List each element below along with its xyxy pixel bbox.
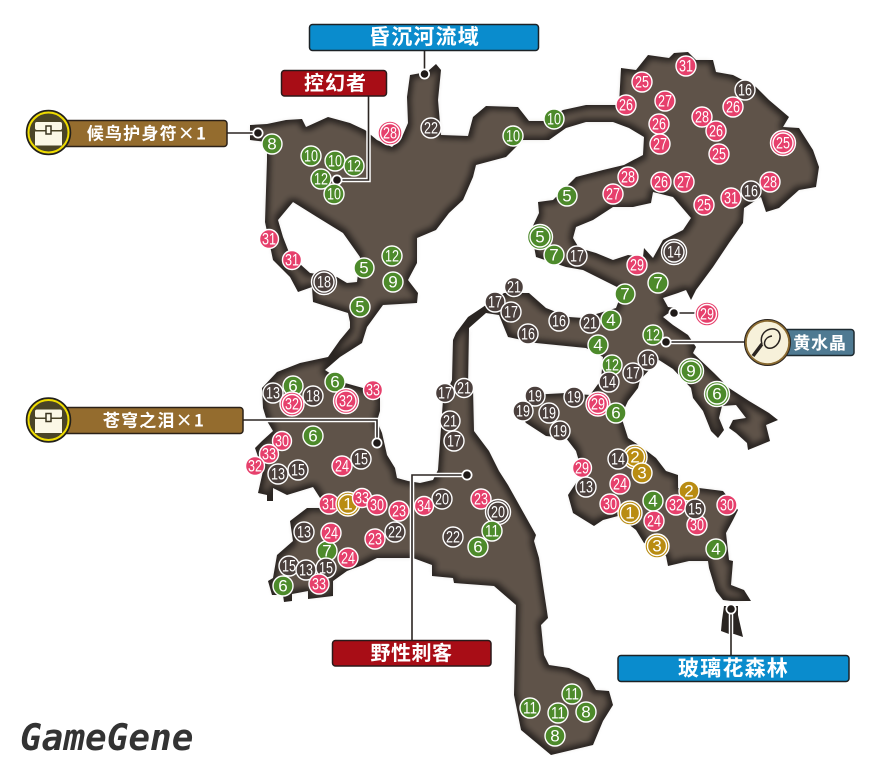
markers: south-west area: 24 [341,548,355,568]
markers: south-east area: 29 [575,458,589,478]
markers: south-west area: 18 [306,386,320,406]
markers: south-east area: 14 [611,450,625,468]
markers: central corridor and south tail: 11 [551,704,565,722]
markers: north-west area: 31 [262,230,276,248]
label: 玻璃花森林: 玻璃花森林 [678,652,789,682]
label: 控幻者 [282,67,386,96]
markers: central arm: 9 [686,362,696,380]
markers: south-west area: 13 [299,560,313,580]
markers: south-east area: 13 [579,478,593,496]
leader line: 玻璃花森林 [726,604,736,655]
markers: north-west area: 12 [314,170,328,188]
leader line: 昏沉河流域 [419,50,430,80]
markers: central corridor and south tail: 6 [473,538,483,556]
markers: south-east area: 1 [625,504,635,522]
label: 昏沉河流域: 昏沉河流域 [369,21,480,51]
markers: north-west area: 22 [424,118,438,138]
markers: north-east area: 25 [712,144,726,164]
markers: north-east area: 26 [619,96,633,114]
markers: north-west area: 31 [285,250,299,270]
markers: south-west area: 33 [312,574,326,594]
markers: central corridor and south tail: 22 [446,528,460,546]
markers: north-west area: 12 [385,246,399,266]
watermark: GameGene: GameGene [20,718,193,759]
markers: south-east area: 3 [652,536,662,556]
markers: central arm: 12 [646,326,660,344]
markers: north-east area: 27 [677,172,691,192]
markers: south-west area: 31 [322,494,336,514]
markers: central arm: 14 [602,372,616,392]
markers: north-east area: 31 [679,56,693,76]
markers: south-west area: 34 [417,496,431,516]
markers: central arm: 4 [593,336,603,354]
markers: north-west area: 10 [327,184,341,204]
markers: south-west area: 15 [354,450,368,468]
markers: south-west area: 7 [322,542,332,560]
leader line: treasure 2 [243,420,382,448]
markers: north-east area: 27 [606,184,620,204]
markers: south-west area: 6 [308,426,318,446]
markers: central arm: 21 [583,314,597,332]
markers: south-west area: 22 [388,522,402,542]
markers: central arm: 21 [507,278,521,296]
markers: north-east area: 10 [547,110,561,128]
markers: north-east area: 29 [630,256,644,274]
markers: south-east area: 19 [553,422,567,440]
markers: south-east area: 4 [648,492,658,510]
markers: north-east area: 5 [562,186,572,206]
markers: north-east area: 7 [653,274,663,292]
markers: south-west area: 6 [330,372,340,392]
icon: whip [744,320,790,366]
markers: central corridor and south tail: 17 [438,384,452,402]
markers: south-west area: 33 [366,380,380,400]
markers: south-east area: 3 [637,464,647,482]
markers: north-west area: 28 [383,124,397,142]
leader line: 控幻者 [332,96,368,186]
markers: north-east area: 25 [635,72,649,92]
markers: south-east area: 19 [567,388,581,406]
markers: central corridor and south tail: 17 [447,432,461,450]
markers: north-east area: 16 [738,80,752,100]
label: 昏沉河流域 [310,21,538,51]
markers: north-west area: 5 [359,258,369,278]
markers: north-west area: 10 [304,146,318,166]
markers: south-east area: 19 [528,386,542,406]
markers: south-east area: 29 [591,394,605,414]
markers: south-west area: 32 [248,456,262,476]
callout: 黄水晶 [744,320,854,366]
markers: north-east area: 27 [653,134,667,154]
label: 野性刺客 [332,637,491,666]
markers: north-east area: 14 [667,242,681,262]
icon: treasure chest [26,110,70,154]
markers: north-west area [260,118,441,317]
markers: central arm: 4 [606,310,616,330]
markers: south-west area: 6 [278,576,288,596]
label: 玻璃花森林 [618,652,849,682]
markers: central corridor and south tail [432,378,596,746]
markers: central arm: 12 [605,356,619,374]
markers: north-west area: 18 [317,272,331,292]
markers: north-east area: 28 [763,172,777,192]
markers: south-west area: 24 [324,524,338,542]
leader line: 野性刺客 [412,470,472,640]
markers: north-east area: 28 [695,108,709,126]
markers: south-east area: 30 [690,516,704,534]
markers: north-east area: 31 [724,188,738,208]
markers: north-east area: 29 [700,304,714,324]
markers: central arm: 16 [521,324,535,344]
markers: north-east area: 10 [506,126,520,146]
leader line: marker 29 [668,308,695,318]
markers: south-east area: 24 [647,512,661,530]
markers: central corridor and south tail: 20 [491,502,505,522]
markers: north-east area: 27 [658,92,672,110]
markers: south-west area: 23 [368,530,382,548]
markers: central corridor and south tail: 23 [474,490,488,508]
markers: south-west area: 23 [392,502,406,520]
markers: south-west area: 33 [262,444,276,464]
markers: south-east area: 24 [613,474,627,494]
markers: south-west area: 24 [335,456,349,476]
markers: north-west area: 9 [388,272,398,292]
markers: south-east area: 32 [669,496,683,514]
markers: south-west area: 30 [370,496,384,514]
markers: central corridor and south tail: 11 [565,684,579,704]
markers: north-east area: 25 [697,196,711,214]
markers: central arm: 6 [712,384,722,404]
markers: north-east area: 7 [549,246,559,264]
markers: south-west area: 32 [285,394,299,414]
label: 控幻者: 控幻者 [304,67,367,96]
markers: central arm: 17 [488,292,502,312]
markers: south-west area: 30 [275,432,289,450]
callout: 候鸟护身符×1 [26,110,227,154]
markers: north-west area: 5 [355,298,365,316]
markers: north-west area: 12 [347,156,361,176]
markers: central arm: 16 [641,350,655,370]
markers: south-west area: 15 [291,460,305,480]
markers: north-east area: 25 [776,134,790,152]
callout: 候鸟护身符×1: 候鸟护身符×1 [87,120,207,144]
markers: central arm [485,278,730,406]
markers: central corridor and south tail: 21 [457,378,471,398]
markers: south-west area: 13 [271,464,285,484]
markers: north-east area: 26 [652,114,666,134]
markers: central corridor and south tail: 21 [443,412,457,430]
markers: north-east area: 7 [620,284,630,304]
markers: north-east area: 16 [744,182,758,200]
markers: south-east area: 30 [720,496,734,514]
markers: north-east area: 28 [621,168,635,186]
markers: south-west area: 32 [339,392,353,410]
markers: south-west area: 13 [297,522,311,542]
markers: south-west area: 13 [266,384,280,402]
markers: south-east area: 6 [611,404,621,422]
markers: south-east area: 2 [684,482,694,500]
markers: south-east area [513,386,737,559]
markers: south-west area: 15 [319,558,333,578]
markers: south-east area: 30 [603,494,617,514]
markers: north-east area: 26 [726,98,740,116]
markers: central corridor and south tail: 11 [523,698,537,718]
markers: south-west area: 6 [288,376,298,396]
markers: south-east area: 4 [711,540,721,558]
markers: south-east area: 19 [542,404,556,422]
markers: central corridor and south tail: 8 [550,726,560,746]
map: dungeon floor [250,52,819,755]
callout: 黄水晶: 黄水晶 [793,329,847,354]
leader line: treasure 1 [227,128,264,138]
icon: treasure chest [26,398,70,442]
markers: north-east area: 26 [709,122,723,140]
markers: north-east area: 26 [654,172,668,192]
markers: north-east area: 5 [535,228,545,246]
markers: north-east area [503,56,796,326]
markers: north-east area: 17 [570,246,584,266]
markers: south-west area: 1 [343,494,353,514]
markers: central corridor and south tail: 11 [485,522,499,540]
markers: south-east area: 2 [630,448,640,466]
markers: south-east area: 19 [516,402,530,420]
markers: south-west area: 15 [282,556,296,576]
markers: central corridor and south tail: 8 [581,702,591,722]
markers: central arm: 16 [552,312,566,330]
leader line: 黄水晶 [660,336,745,348]
markers: south-west area [246,372,434,596]
callout: 苍穹之泪×1 [26,398,243,442]
markers: south-east area: 15 [688,500,702,518]
markers: central arm: 17 [626,364,640,382]
markers: north-west area: 8 [267,134,277,154]
label: 野性刺客: 野性刺客 [370,637,452,666]
markers: central corridor and south tail: 20 [435,490,449,508]
markers: central arm: 17 [504,302,518,322]
callout: 苍穹之泪×1: 苍穹之泪×1 [103,406,205,432]
markers: north-west area: 10 [328,152,342,170]
markers: south-west area: 33 [355,488,369,508]
